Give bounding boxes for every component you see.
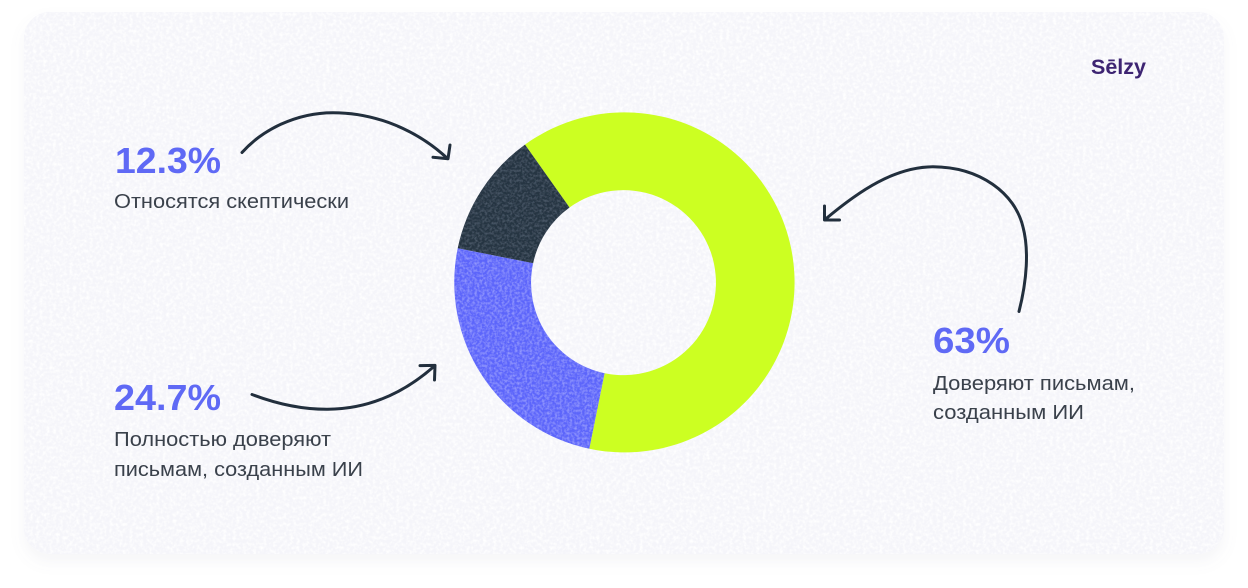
label: trust: Доверяют письмам, bbox=[933, 373, 1135, 395]
callout: 24.7% bbox=[114, 377, 363, 481]
segment: 24.7% fully trust, blue bbox=[454, 248, 605, 449]
callout: 63%: созданным ИИ bbox=[933, 402, 1084, 424]
callout: 24.7%: письмам, созданным ИИ bbox=[114, 459, 363, 481]
arrow: 12.3% to dark segment bbox=[242, 113, 450, 159]
donut chart bbox=[454, 112, 795, 452]
number: 63%: 63% bbox=[933, 320, 1010, 361]
callout: 12.3% bbox=[114, 140, 349, 213]
label: fully trust: Полностью доверяют bbox=[114, 429, 331, 451]
segment: 63% trust, lime bbox=[525, 112, 795, 452]
arrow: 24.7% to blue segment bbox=[252, 365, 435, 409]
logo: Selzy: Sēlzy bbox=[1091, 56, 1146, 79]
arrow: 63% to lime segment bbox=[824, 167, 1026, 312]
number: 12.3%: 12.3% bbox=[115, 140, 221, 181]
callout: 63% bbox=[933, 320, 1135, 424]
segment: 12.3% sceptical, dark bbox=[458, 145, 570, 263]
label: sceptical: Относятся скептически bbox=[114, 191, 349, 213]
number: 24.7%: 24.7% bbox=[114, 377, 221, 418]
